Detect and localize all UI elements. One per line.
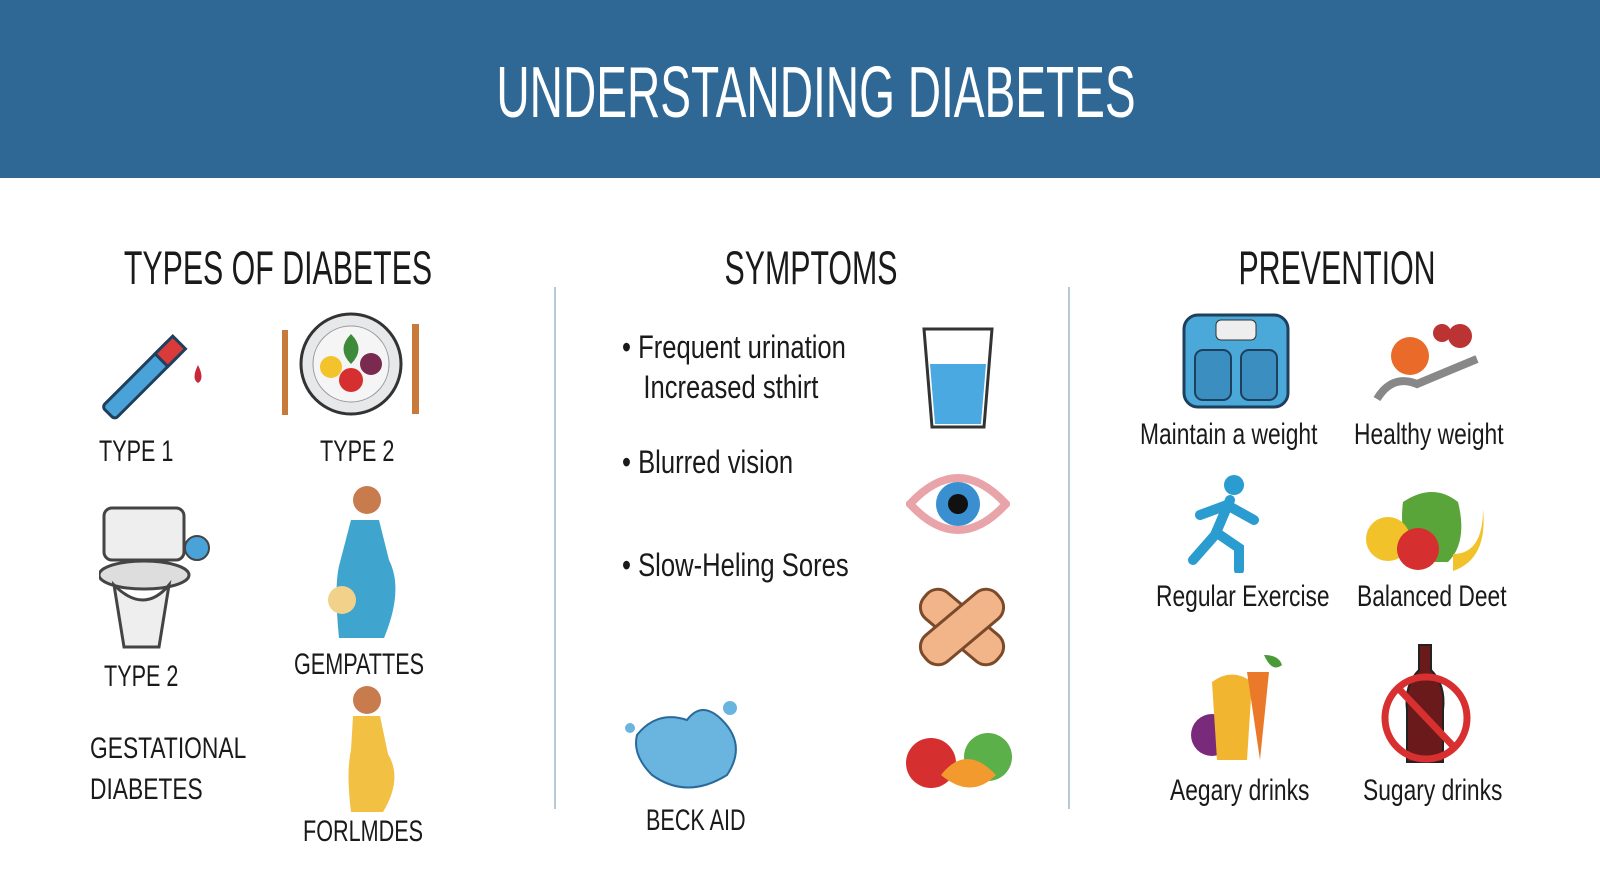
heading: types: TYPES OF DIABETES bbox=[124, 241, 432, 294]
symptom text 2: • Blurred vision bbox=[622, 444, 793, 480]
label: beck aid: BECK AID bbox=[646, 804, 746, 837]
icon: water splash bbox=[625, 701, 737, 788]
label: type 2: TYPE 2 bbox=[320, 435, 394, 468]
heading: symptoms: SYMPTOMS bbox=[725, 241, 897, 294]
label: gestational diabetes: DIABETES bbox=[90, 773, 203, 806]
icon: bandage bbox=[918, 588, 1006, 666]
icon: runner bbox=[1188, 475, 1259, 573]
icon: fruits and carrot bbox=[1191, 655, 1282, 760]
panel: types bbox=[90, 312, 424, 848]
title: UNDERSTANDING DIABETES bbox=[496, 53, 1136, 133]
label: gempattes: GEMPATTES bbox=[294, 648, 424, 681]
panel: symptoms bbox=[622, 328, 1012, 837]
icon: no soda bbox=[1382, 644, 1470, 763]
label: gestational diabetes bbox=[90, 732, 246, 806]
label: balanced deet: Balanced Deet bbox=[1357, 580, 1507, 613]
label: regular exercise: Regular Exercise bbox=[1156, 580, 1330, 613]
icon: scale bbox=[1182, 314, 1290, 408]
symptom text 3: • Slow-Heling Sores bbox=[622, 547, 849, 583]
icon: glass bbox=[922, 328, 994, 428]
icon: eye bbox=[906, 474, 1010, 534]
label: gestational diabetes: GESTATIONAL bbox=[90, 732, 246, 765]
label: maintain a weight: Maintain a weight bbox=[1140, 418, 1317, 451]
label: forlmdes: FORLMDES bbox=[303, 815, 423, 848]
symptom text 1 bbox=[622, 329, 846, 405]
icon: plate bbox=[282, 312, 419, 416]
label: sugary drinks: Sugary drinks bbox=[1363, 774, 1502, 807]
panel: prevention bbox=[1140, 314, 1507, 807]
icon: pregnant woman yellow bbox=[348, 686, 394, 812]
symptom text 1: • Frequent urination bbox=[622, 329, 846, 365]
symptom text 1: Increased sthirt bbox=[643, 369, 818, 405]
icon: pregnant woman blue bbox=[328, 486, 396, 638]
label: type 2 second: TYPE 2 bbox=[104, 660, 178, 693]
icon: fruit scale bbox=[1374, 324, 1478, 401]
label: healthy weight: Healthy weight bbox=[1354, 418, 1504, 451]
heading: prevention: PREVENTION bbox=[1238, 241, 1436, 294]
icon: insulin pen bbox=[102, 334, 202, 420]
icon: toilet bbox=[99, 506, 210, 648]
header banner bbox=[0, 0, 1600, 178]
icon: fruits bbox=[906, 733, 1012, 788]
label: type 1: TYPE 1 bbox=[99, 435, 173, 468]
icon: fruit basket bbox=[1366, 492, 1484, 571]
label: aegary drinks: Aegary drinks bbox=[1170, 774, 1309, 807]
